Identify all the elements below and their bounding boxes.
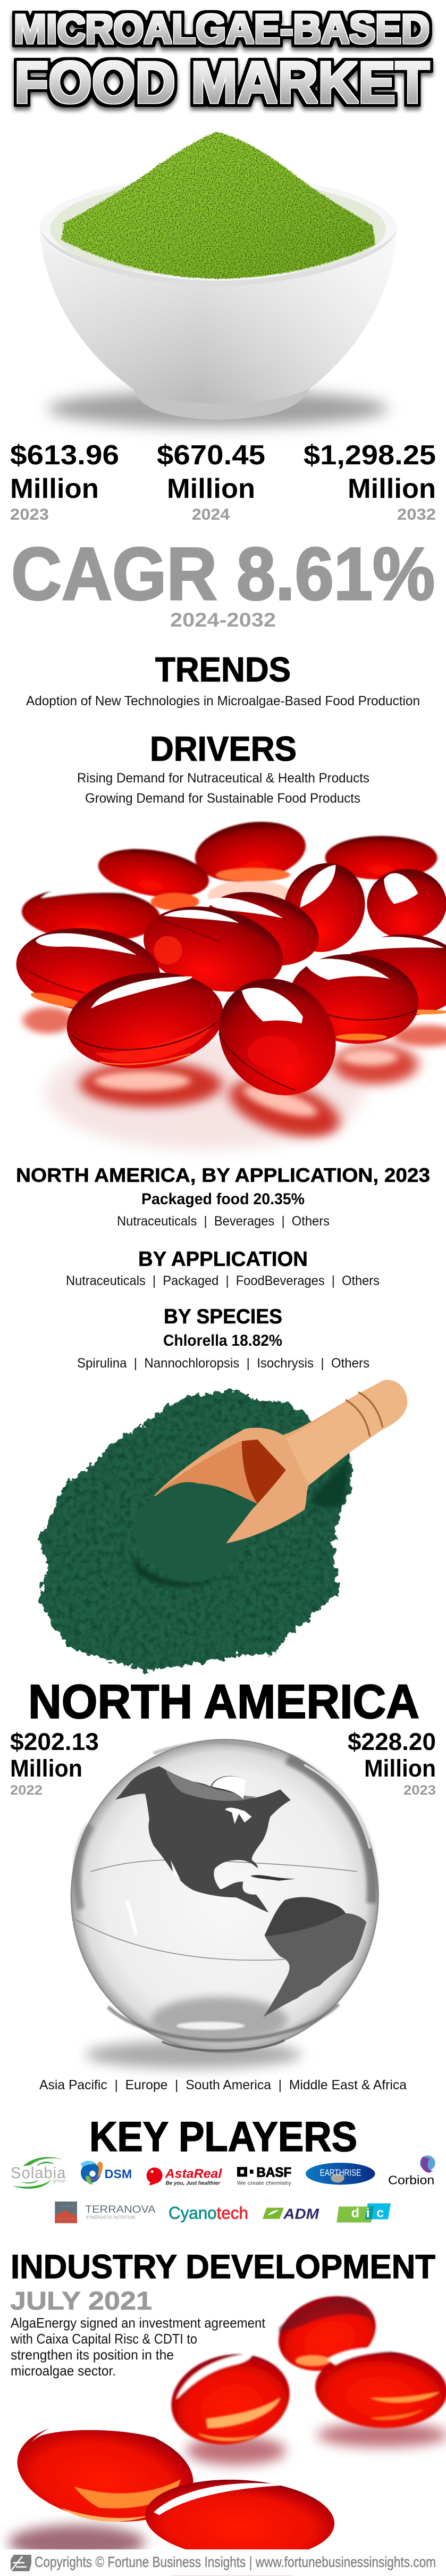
stat: North America 2022: 2022 (10, 1783, 43, 1798)
logo: DSM: DSM (105, 2167, 132, 2181)
logo: Earthrise (306, 2163, 375, 2185)
logo: ADM: ADM (283, 2206, 319, 2222)
continent: North America (115, 1766, 291, 1913)
text: development detail: with Caixa Capital Risc & CDTI to (10, 2331, 197, 2347)
heading: drivers: DRIVERS (150, 729, 297, 768)
stat: North America 2022: Million (10, 1755, 82, 1782)
heading: North America by application: NORTH AMERICA, BY APPLICATION, 2023 (16, 1164, 430, 1186)
logo: Terranova: TERRANOVA (85, 2204, 156, 2215)
text: drivers detail: Growing Demand for Sustainable Food Products (85, 791, 360, 806)
illustration: spirulina powder with wooden scoop (38, 1380, 407, 1670)
logo: Terranova: NOVA (60, 2217, 73, 2220)
logos row: right (237, 2155, 435, 2222)
text: drivers detail: Rising Demand for Nutraceutical & Health Products (77, 771, 369, 786)
illustration: red softgel capsules (9, 814, 446, 1150)
stat: North America 2022: $202.13 (10, 1728, 99, 1755)
heading: by application: BY APPLICATION (138, 1248, 308, 1271)
stat: North America 2023: Million (364, 1755, 436, 1782)
title: FOOD MARKET (14, 50, 430, 115)
text: drivers detail (77, 771, 369, 806)
logo: Terranova (55, 2202, 156, 2223)
stat: 2024 market size: Million (167, 473, 255, 504)
continent: South America (263, 1897, 366, 2017)
text: other application segments: Nutraceuticals | Beverages | Others (117, 1214, 330, 1229)
logo: Solabia (11, 2157, 66, 2189)
logos row: left (11, 2157, 248, 2223)
logo: AstaReal: AstaReal (165, 2166, 223, 2181)
CAGR period: 2024-2032 (170, 609, 276, 631)
stat: chlorella share: Chlorella 18.82% (163, 1332, 282, 1349)
text: trends detail: Adoption of New Technologies in Microalgae-Based Food Production (26, 694, 420, 708)
illustration: blurred red capsules (9, 2284, 446, 2564)
illustration: glass globe (71, 1739, 379, 2069)
stat: 2023 market size: Million (10, 473, 99, 504)
logo: Terranova: TERRA (60, 2205, 73, 2207)
logo: Corbion (388, 2155, 435, 2187)
text: industry development heading: INDUSTRY DEVELOPMENT (11, 2248, 435, 2286)
footer (11, 2554, 436, 2571)
title (14, 6, 430, 115)
stat: 2024 market size: 2024 (192, 506, 230, 523)
stat: 2032 market size (304, 440, 436, 523)
logo: BASF (237, 2165, 291, 2187)
text: other regions: Asia Pacific | Europe | South America | Middle East & Africa (39, 2078, 407, 2093)
text: development detail: strengthen its position in the (11, 2347, 174, 2363)
stat: packaged food share: Packaged food 20.35% (141, 1190, 305, 1208)
heading: key players: KEY PLAYERS (89, 2113, 357, 2160)
stat: 2023 market size: $613.96 (10, 440, 119, 471)
stat: North America 2023: $228.20 (348, 1728, 436, 1755)
stat: 2032 market size: $1,298.25 (304, 440, 436, 471)
logo: Solabia: group (53, 2178, 65, 2183)
heading: North America: NORTH AMERICA (28, 1675, 419, 1729)
stat: 2023 market size (10, 440, 119, 523)
text: development detail (10, 2315, 266, 2379)
logo: Solabia: Solabia (11, 2164, 66, 2182)
stat: 2032 market size: Million (348, 473, 436, 504)
stat: 2023 market size: 2023 (10, 506, 49, 523)
logo: BASF: BASF (256, 2165, 291, 2180)
logo: Corbion: Corbion (388, 2173, 434, 2187)
text: development date: JULY 2021 (10, 2287, 152, 2315)
icon: bowl of green microalgae powder (39, 132, 397, 427)
heading: by species: BY SPECIES (164, 1305, 282, 1328)
logo: DSM (81, 2161, 132, 2185)
logo: DIC: dic (351, 2205, 384, 2220)
icon: Fortune Business Insights mark (11, 2555, 31, 2571)
logo: Cyanotech: Cyanotech (169, 2203, 248, 2223)
stat: 2024 market size (157, 440, 265, 523)
logo: Earthrise: EARTHRISE (320, 2167, 361, 2178)
logo: DIC (336, 2203, 391, 2222)
text: development detail: microalgae sector. (11, 2363, 116, 2379)
logo: Terranova: SYNERGISTIC NUTRITION (86, 2215, 135, 2220)
text: species segments: Spirulina | Nannochloropsis | Isochrysis | Others (77, 1356, 369, 1371)
stat: North America 2023 (348, 1728, 436, 1798)
stat: North America 2022 (10, 1728, 99, 1798)
stat: North America 2023: 2023 (403, 1783, 436, 1798)
logo: AstaReal (147, 2166, 223, 2187)
logo: BASF: We create chemistry (237, 2181, 291, 2187)
heading: trends: TRENDS (155, 650, 291, 689)
stat: 2032 market size: 2032 (397, 506, 436, 523)
text: application segments: Nutraceuticals | Packaged | FoodBeverages | Others (66, 1273, 380, 1288)
logo: ADM (263, 2206, 319, 2222)
text: development detail: AlgaEnergy signed an investment agreement (11, 2315, 266, 2331)
logo: AstaReal: Be you, Just healthier (166, 2181, 221, 2187)
title: MICROALGAE-BASED (14, 6, 430, 52)
stat: 2024 market size: $670.45 (157, 440, 265, 471)
